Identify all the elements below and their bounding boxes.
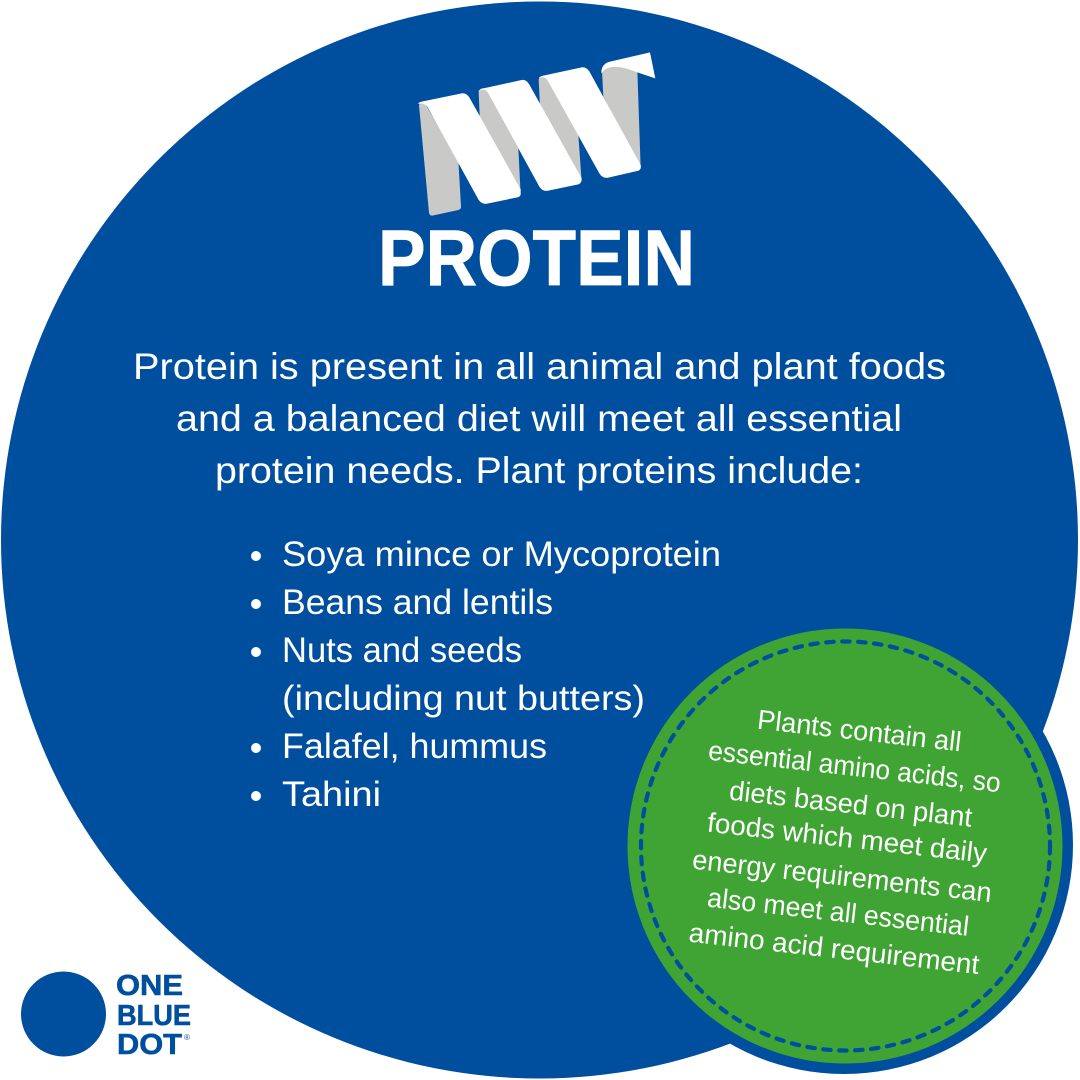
- logo: One Blue Dot: BLUE: [117, 1000, 191, 1032]
- callout: amino acids badge: essential amino acids, so: [707, 735, 1002, 798]
- text block: introduction: and a balanced diet will meet all essential: [176, 398, 902, 439]
- callout: amino acids badge: also meet all essential: [706, 882, 971, 942]
- callout: amino acids badge: diets based on plant: [728, 775, 974, 833]
- list: plant proteins: (including nut butters): [282, 678, 645, 718]
- list: plant proteins: Beans and lentils: [282, 582, 553, 622]
- logo: One Blue Dot: ONE: [116, 970, 183, 1002]
- callout: amino acids badge: [615, 616, 1073, 1074]
- list: plant proteins: Falafel, hummus: [282, 726, 547, 766]
- icon: protein ribbon: [418, 52, 655, 216]
- list: plant proteins: Soya mince or Mycoprotein: [282, 534, 721, 574]
- text block: introduction: protein needs. Plant proteins include:: [215, 450, 863, 491]
- text block: introduction: [133, 346, 946, 491]
- callout: amino acids badge: Plants contain all: [756, 704, 963, 757]
- callout: amino acids badge: amino acid requirement: [687, 917, 981, 980]
- callout: amino acids badge: energy requirements can: [691, 844, 993, 908]
- logo: One Blue Dot: DOT: [117, 1029, 182, 1061]
- logo: One Blue Dot: [21, 970, 191, 1061]
- list: plant proteins: [251, 534, 721, 814]
- list: plant proteins: Nuts and seeds: [282, 630, 522, 670]
- list: plant proteins: Tahini: [282, 774, 381, 814]
- heading: PROTEIN: PROTEIN: [378, 213, 695, 302]
- callout: amino acids badge: foods which meet daily: [706, 807, 989, 869]
- text block: introduction: Protein is present in all animal and plant foods: [133, 346, 946, 387]
- logo: One Blue Dot: ®: [184, 1033, 190, 1042]
